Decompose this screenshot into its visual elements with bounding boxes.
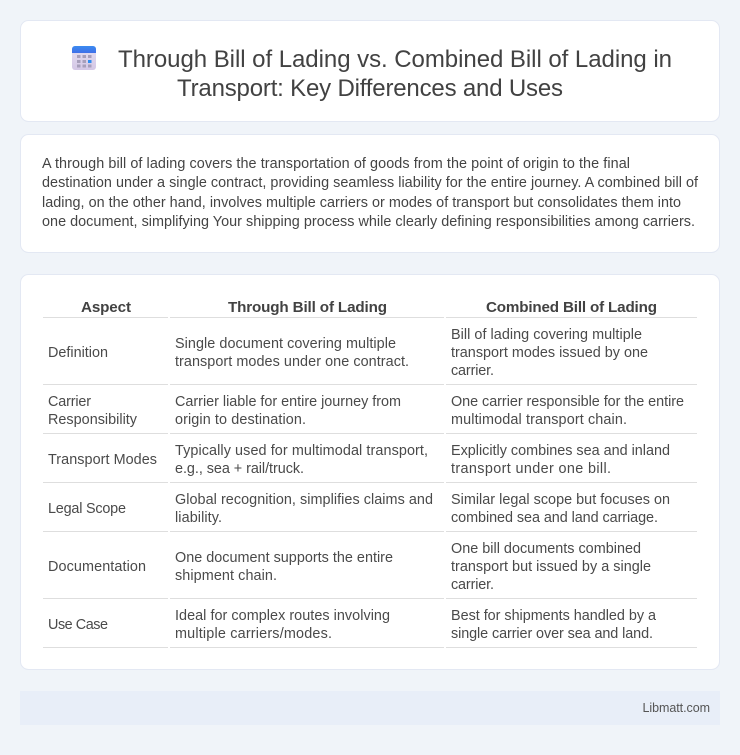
intro text: lading, on the other hand, involves multiple carriers or modes of transport but consolidates them into [42, 195, 681, 211]
row: documentation: Documentation [48, 559, 146, 575]
row: documentation: transport but issued by a single [451, 559, 651, 575]
table header: Aspect [81, 299, 131, 316]
footer bar [20, 691, 720, 725]
row: definition: transport modes issued by one [451, 345, 648, 361]
intro text: A through bill of lading covers the transportation of goods from the point of origin to the final [42, 156, 630, 172]
row: carrier responsibility [48, 394, 684, 428]
footer brand: Libmatt.com [642, 701, 710, 715]
row: legal scope: Legal Scope [48, 501, 126, 517]
row: documentation: One document supports the entire [175, 550, 393, 566]
intro text: destination under a single contract, providing seamless liability for the entire journey. A combined bill of [42, 175, 699, 191]
header panel [20, 20, 720, 122]
row: documentation [48, 541, 651, 593]
row: definition: Definition [48, 345, 108, 361]
row: use case: multiple carriers/modes. [175, 626, 332, 642]
row: documentation: carrier. [451, 577, 494, 593]
row: definition: carrier. [451, 363, 494, 379]
row: definition [48, 327, 648, 379]
row: carrier responsibility: Carrier liable for entire journey from [175, 394, 401, 410]
panel: comparison table [20, 274, 720, 670]
title [118, 46, 672, 102]
row: carrier responsibility: One carrier responsible for the entire [451, 394, 684, 410]
table header [81, 299, 657, 316]
row: legal scope: combined sea and land carriage. [451, 510, 658, 526]
row: carrier responsibility: origin to destination. [175, 412, 306, 428]
row: definition: Bill of lading covering multiple [451, 327, 642, 343]
row: definition: Single document covering multiple [175, 336, 396, 352]
row: transport modes: Typically used for multimodal transport, [175, 443, 428, 459]
row: use case: Best for shipments handled by a [451, 608, 656, 624]
row: legal scope: liability. [175, 510, 222, 526]
row: carrier responsibility: multimodal transport chain. [451, 412, 627, 428]
row: transport modes: e.g., sea + rail/truck. [175, 461, 304, 477]
title: Through Bill of Lading vs. Combined Bill of Lading in [118, 46, 672, 73]
row: legal scope: Similar legal scope but focuses on [451, 492, 670, 508]
row: legal scope [48, 492, 670, 526]
row: transport modes: Explicitly combines sea and inland [451, 443, 670, 459]
intro text [42, 156, 699, 230]
row: carrier responsibility: Carrier [48, 394, 91, 410]
row: legal scope: Global recognition, simplifies claims and [175, 492, 433, 508]
row: transport modes: Transport Modes [48, 452, 157, 468]
row: use case: Use Case [48, 617, 108, 633]
table header: Through Bill of Lading [228, 299, 387, 316]
row: transport modes: transport under one bill. [451, 461, 611, 477]
row: use case: single carrier over sea and land. [451, 626, 653, 642]
row: documentation: shipment chain. [175, 568, 277, 584]
row: definition: transport modes under one contract. [175, 354, 409, 370]
title: Transport: Key Differences and Uses [177, 75, 563, 102]
row: use case: Ideal for complex routes involving [175, 608, 390, 624]
row: transport modes [48, 443, 670, 477]
icon: calendar [72, 46, 96, 70]
table header: Combined Bill of Lading [486, 299, 657, 316]
row: documentation: One bill documents combined [451, 541, 641, 557]
panel: intro [20, 134, 720, 252]
intro text: one document, simplifying Your shipping process while clearly defining responsibilities among carriers. [42, 214, 695, 230]
row: carrier responsibility: Responsibility [48, 412, 138, 428]
row: use case [48, 608, 656, 642]
